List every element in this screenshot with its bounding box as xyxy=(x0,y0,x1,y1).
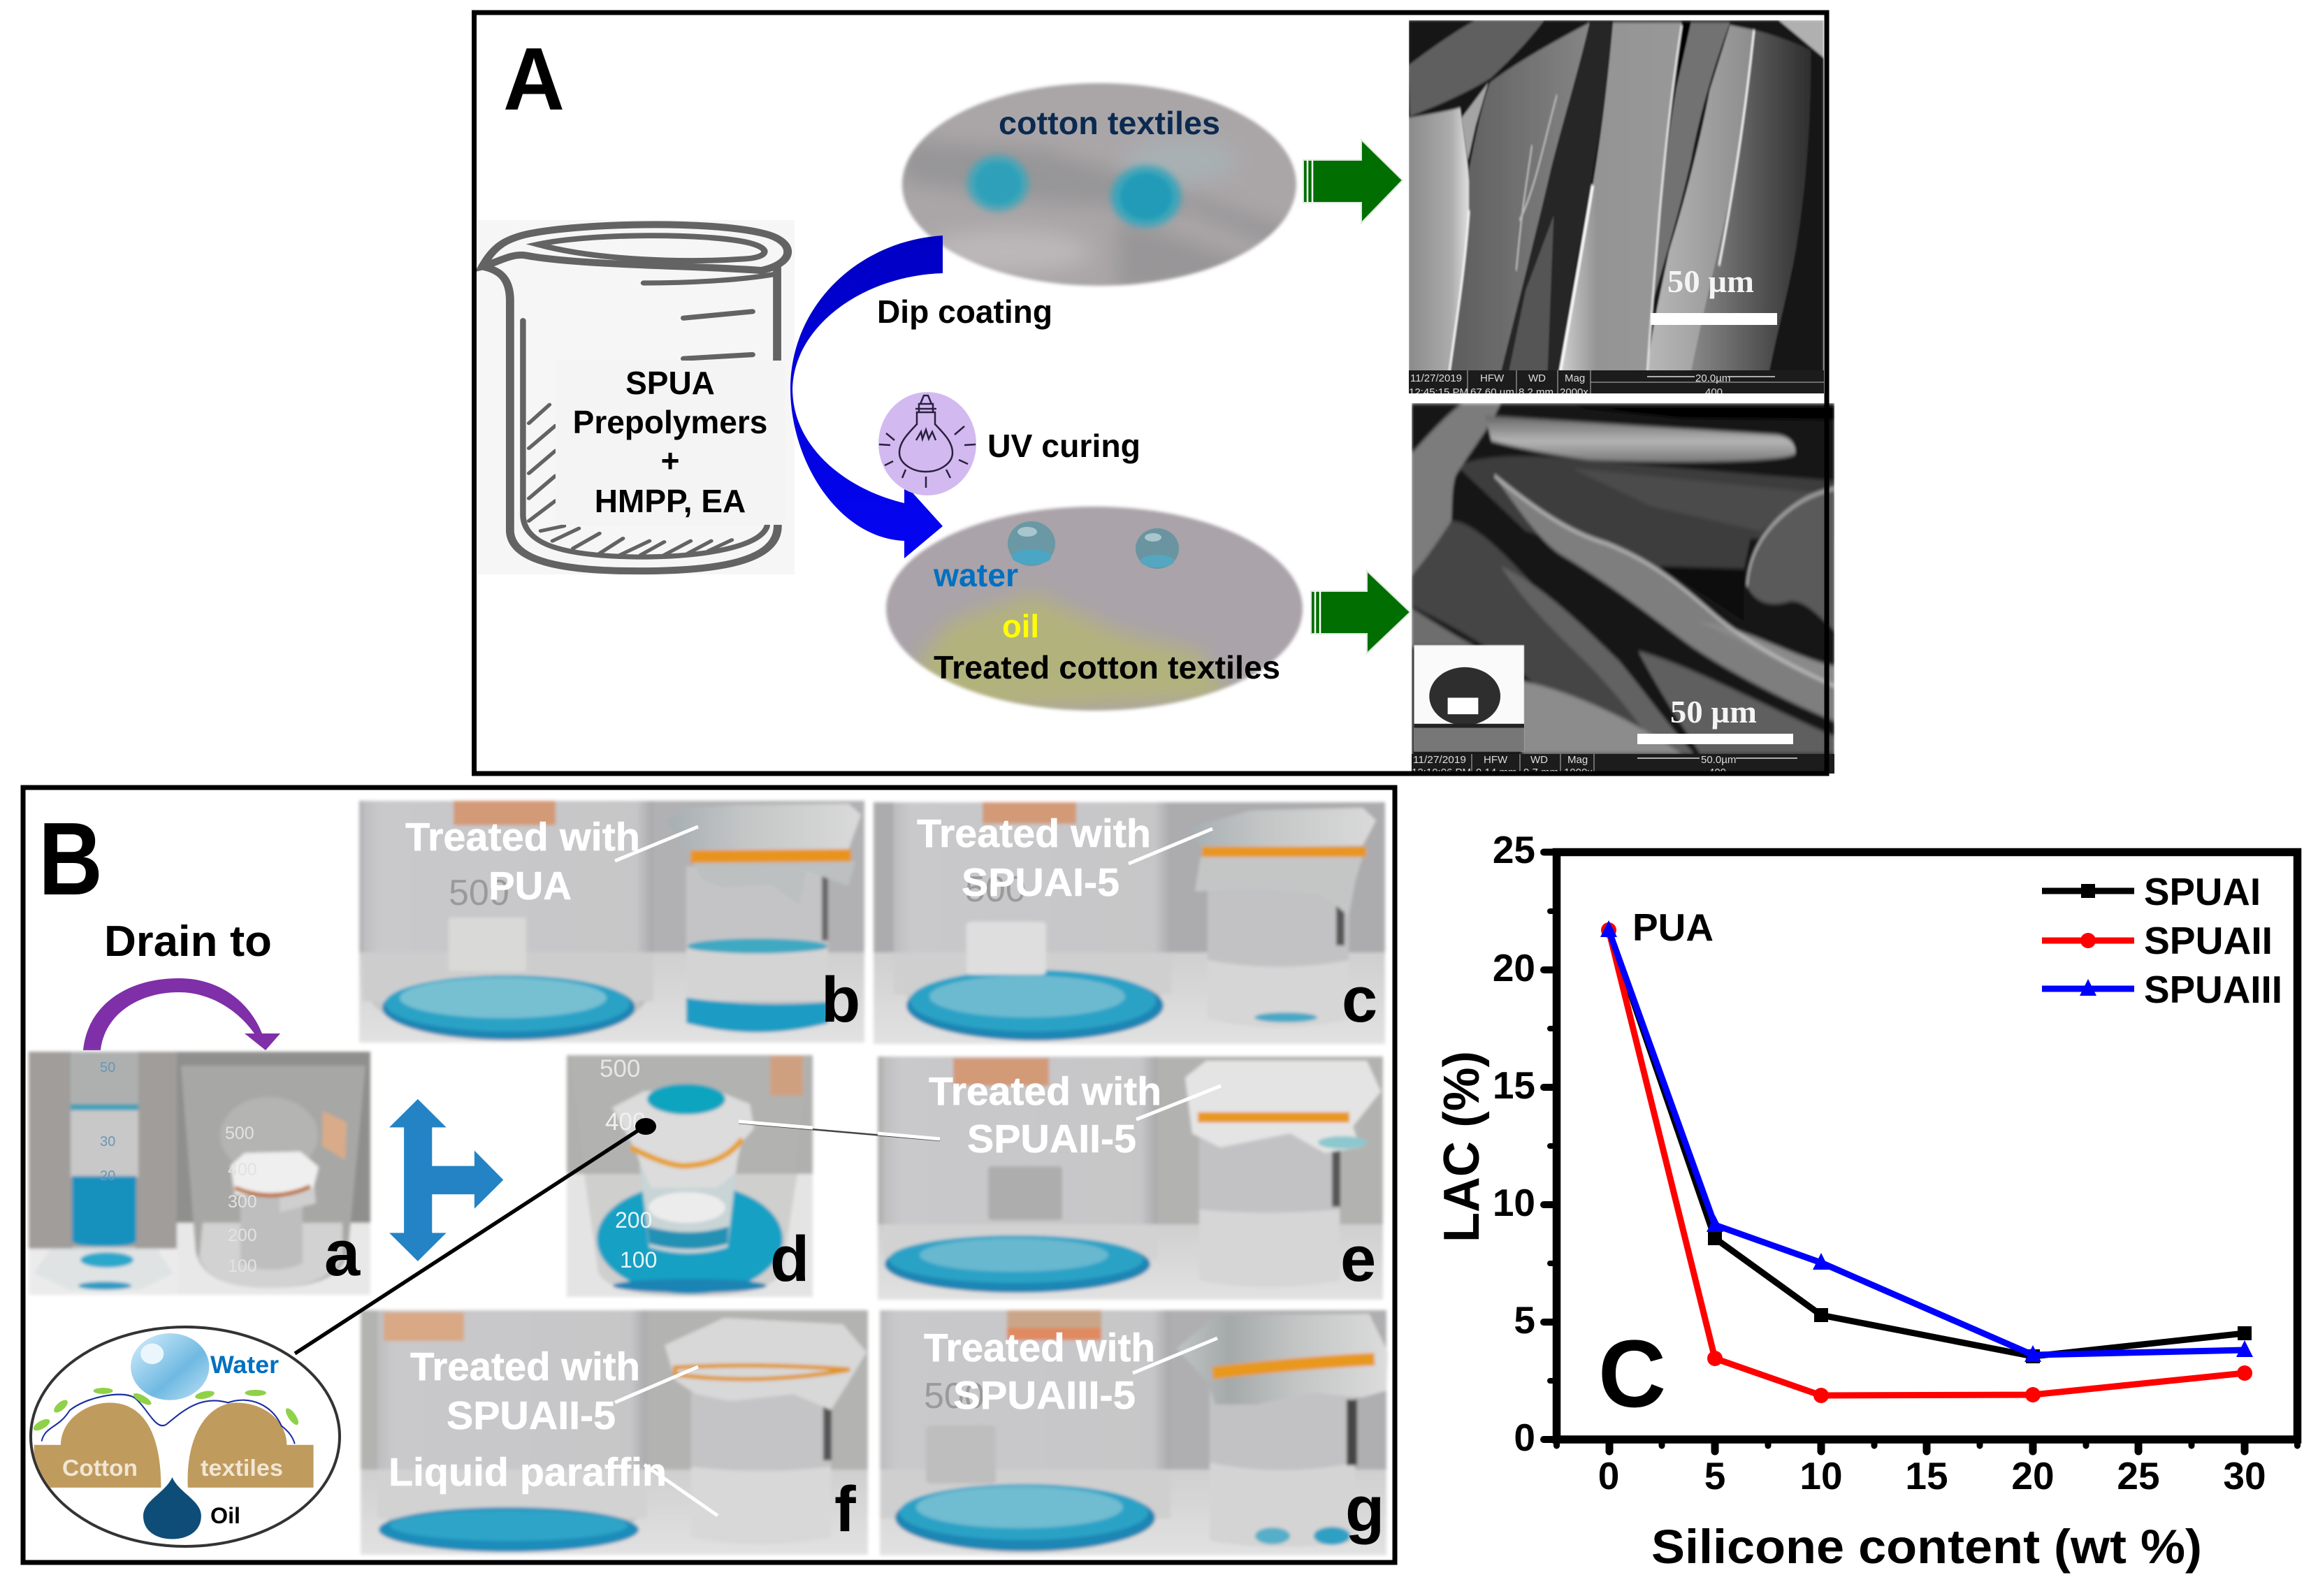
text: SPUA prepolymers label: SPUA xyxy=(625,365,715,401)
text: Treated with PUA xyxy=(405,815,698,908)
x axis tick labels: 5 xyxy=(1704,1454,1725,1497)
SEM info bar xyxy=(1412,754,1834,774)
leader line from photo d to SPUAII-5 label xyxy=(739,1122,940,1140)
graduated numbers on glassware: 100 xyxy=(228,1256,257,1276)
text: Treated with SPUAII-5: Treated with xyxy=(929,1069,1161,1114)
text: SPUA prepolymers label: Prepolymers xyxy=(573,404,767,440)
SEM info bar: 11/27/2019 xyxy=(1410,372,1462,384)
photo: treated cotton textile ellipse with water and oil xyxy=(886,507,1303,713)
letter f: f xyxy=(834,1474,856,1545)
graduated numbers on glassware: 300 xyxy=(228,1192,257,1212)
text: cotton textiles: cotton textiles xyxy=(999,105,1220,141)
SEM info bar: 11/27/2019 xyxy=(1413,754,1466,766)
SEM image: untreated cotton fibres xyxy=(1409,20,1824,398)
text: Treated with SPUAII-5 and Liquid paraffin xyxy=(389,1344,718,1516)
y axis tick labels: 15 xyxy=(1493,1064,1535,1107)
text: Treated with SPUAI-5: Treated with xyxy=(917,811,1151,856)
letter b: b xyxy=(821,964,860,1036)
y axis title: LAC (%) xyxy=(1434,1051,1490,1242)
SEM info bar: WD xyxy=(1528,372,1546,384)
text: Cotton: Cotton xyxy=(62,1455,138,1481)
x axis tick labels: 0 xyxy=(1598,1454,1619,1497)
icon: beaker with SPUA prepolymers xyxy=(478,220,795,574)
text: Oil: Oil xyxy=(210,1503,240,1528)
graduated numbers on beaker d: 200 xyxy=(615,1207,652,1233)
scale bar: 50 µm: 50 µm xyxy=(1670,694,1757,730)
SEM info bar: 9.14 mm xyxy=(1476,767,1516,778)
arrow: blue three-way arrow xyxy=(389,1099,503,1261)
panel B frame xyxy=(23,788,1395,1562)
inset: droplet contact angle photo xyxy=(1414,645,1524,751)
text: Treated with SPUAII-5 and Liquid paraffin: Liquid paraffin xyxy=(389,1450,667,1495)
SEM info bar: 2000x xyxy=(1560,386,1588,398)
text: Water: Water xyxy=(210,1351,279,1379)
graduated numbers on beaker d: 100 xyxy=(620,1247,657,1272)
blue water stains xyxy=(967,155,1181,227)
series SPUAII xyxy=(1601,922,2252,1403)
scale bar: 50 µm xyxy=(1651,271,1777,325)
text: Treated with SPUAIII-5: Treated with xyxy=(924,1326,1155,1370)
graduated numbers on glassware: 50 xyxy=(100,1060,115,1075)
photo d: treated fabric on beaker xyxy=(567,1055,813,1297)
legend: SPUAI xyxy=(2144,870,2261,913)
text: Treated cotton textiles: Treated cotton textiles xyxy=(934,649,1280,685)
y axis tick labels xyxy=(1493,828,1535,1459)
arrow: green arrow to SEM of untreated fibre xyxy=(1303,140,1403,223)
text: Treated with SPUAII-5 and Liquid paraffin: SPUAII-5 xyxy=(447,1393,616,1438)
graduated numbers on glassware: 500 xyxy=(225,1124,254,1143)
SEM info bar: HFW xyxy=(1484,754,1508,766)
letter e: e xyxy=(1340,1224,1376,1295)
water droplet xyxy=(131,1333,209,1400)
SEM info bar: 400 xyxy=(1709,767,1726,778)
scale bar: 50 µm xyxy=(1637,702,1793,744)
water droplets xyxy=(1008,521,1179,569)
photo e: treated with SPUAII-5 xyxy=(878,1057,1383,1300)
SEM info bar: WD xyxy=(1530,754,1548,766)
oil droplet xyxy=(143,1477,201,1539)
text: Treated with SPUAIII-5 xyxy=(924,1326,1217,1418)
SEM info bar: HFW xyxy=(1480,372,1505,384)
arrow: purple drain arc xyxy=(83,978,280,1050)
letter c: c xyxy=(1342,964,1377,1036)
letter d: d xyxy=(770,1224,809,1295)
y axis tick labels: 0 xyxy=(1514,1416,1535,1459)
SEM image: treated cotton fibres with contact angle inset xyxy=(1412,403,1834,778)
SEM info bar: 12:10:06 PM xyxy=(1412,767,1471,778)
schematic: oval of coated cotton fibres xyxy=(31,1327,340,1546)
text: Treated with SPUAII-5 xyxy=(929,1069,1221,1161)
y axis tick labels: 25 xyxy=(1493,828,1535,871)
icon: UV light bulb xyxy=(878,392,976,495)
x axis title: Silicone content (wt %) xyxy=(1651,1520,2202,1574)
text: Treated with SPUAII-5: SPUAII-5 xyxy=(967,1117,1136,1161)
text: Treated with PUA: Treated with xyxy=(405,815,640,859)
photo a: cylinder and beaker xyxy=(29,1052,370,1295)
text: oil: oil xyxy=(1002,608,1039,644)
panel A: dip coating and UV curing process xyxy=(474,13,1834,778)
text: Treated with SPUAII-5 and Liquid paraffin: Treated with xyxy=(410,1344,640,1389)
x axis tick labels: 25 xyxy=(2117,1454,2160,1497)
SEM info bar: 12:45:15 PM xyxy=(1409,386,1468,398)
text: Treated with PUA: PUA xyxy=(488,864,572,908)
graduated numbers on beaker d: 500 xyxy=(600,1055,640,1082)
panel B: oil water separation photographs xyxy=(23,788,1395,1562)
text: UV curing: UV curing xyxy=(987,428,1140,464)
legend: SPUAIII xyxy=(2144,968,2282,1011)
photo c: treated with SPUAI-5 xyxy=(874,802,1385,1044)
graduated numbers on beaker d: 400 xyxy=(605,1108,646,1136)
faint 500 mark on beaker: 500 xyxy=(924,1376,985,1416)
graduated numbers on glassware: 400 xyxy=(228,1160,257,1180)
text: textiles: textiles xyxy=(201,1455,283,1481)
text: Dip coating: Dip coating xyxy=(877,293,1052,330)
panel label C: C xyxy=(1598,1321,1666,1428)
graduated numbers on glassware xyxy=(100,1060,257,1276)
text: SPUA prepolymers label: + xyxy=(661,442,679,479)
photo: untreated cotton textile ellipse xyxy=(901,83,1300,293)
cotton fibre humps xyxy=(34,1402,314,1488)
legend xyxy=(2042,870,2282,1011)
panel C: LAC versus silicone content line chart xyxy=(1434,828,2298,1574)
polymer chains and green groups xyxy=(32,1388,300,1444)
photo b: treated with PUA xyxy=(359,801,864,1043)
photo g: treated with SPUAIII-5 xyxy=(880,1310,1388,1555)
SEM info bar: 20.0µm xyxy=(1695,372,1730,384)
text: Treated with SPUAI-5: SPUAI-5 xyxy=(962,860,1120,905)
x axis tick labels: 10 xyxy=(1799,1454,1843,1497)
faint 500 mark on beaker: 500 xyxy=(449,873,509,913)
letter a: a xyxy=(324,1218,361,1289)
legend: SPUAII xyxy=(2144,919,2273,962)
SEM info bar xyxy=(1409,370,1824,393)
SEM info bar: 67.60 µm xyxy=(1470,386,1514,398)
panel A frame xyxy=(474,13,1827,774)
text: water: water xyxy=(933,557,1018,593)
faint 500 mark on beaker: 500 xyxy=(965,869,1026,910)
scale bar: 50 µm: 50 µm xyxy=(1667,263,1754,299)
arrow: blue curved process arrow xyxy=(790,235,943,558)
arrow: green arrow to SEM of treated fibre xyxy=(1311,571,1410,653)
text: Treated with SPUAI-5 xyxy=(917,811,1212,905)
panel label A: A xyxy=(503,29,565,129)
SEM info bar: 400 xyxy=(1705,386,1723,398)
graduated numbers on glassware: 20 xyxy=(100,1168,115,1184)
text: Treated with SPUAIII-5: SPUAIII-5 xyxy=(953,1373,1136,1418)
SEM info bar: Mag xyxy=(1567,754,1588,766)
SEM info bar: 1000x xyxy=(1564,767,1593,778)
panel label B: B xyxy=(38,801,103,917)
x axis tick labels: 20 xyxy=(2011,1454,2055,1497)
series SPUAIII xyxy=(1600,920,2253,1362)
SEM info bar: Mag xyxy=(1565,372,1585,384)
x axis tick labels: 30 xyxy=(2223,1454,2266,1497)
graduated numbers on glassware: 200 xyxy=(228,1226,257,1245)
graduated numbers on beaker d xyxy=(600,1055,657,1272)
SEM info bar: 8.2 mm xyxy=(1519,386,1553,398)
y axis tick labels: 10 xyxy=(1493,1181,1535,1224)
SEM info bar: 9.7 mm xyxy=(1523,767,1558,778)
annotation: PUA: PUA xyxy=(1632,906,1714,949)
photo f: SPUAII-5 with liquid paraffin xyxy=(361,1310,868,1555)
y axis tick labels: 20 xyxy=(1493,946,1535,989)
chart frame and ticks xyxy=(1544,853,2298,1451)
letter g: g xyxy=(1345,1474,1384,1545)
x axis tick labels: 15 xyxy=(1905,1454,1948,1497)
text: SPUA prepolymers label: HMPP, EA xyxy=(595,483,746,519)
text: SPUA prepolymers label xyxy=(556,361,785,525)
callout line from photo d to schematic xyxy=(295,1118,656,1354)
series SPUAI xyxy=(1609,930,2252,1363)
graduated numbers on glassware: 30 xyxy=(100,1134,115,1149)
SEM info bar: 50.0µm xyxy=(1701,754,1736,766)
y axis tick labels: 5 xyxy=(1514,1298,1535,1342)
x axis tick labels xyxy=(1598,1454,2266,1497)
text: Drain to: Drain to xyxy=(104,917,272,966)
